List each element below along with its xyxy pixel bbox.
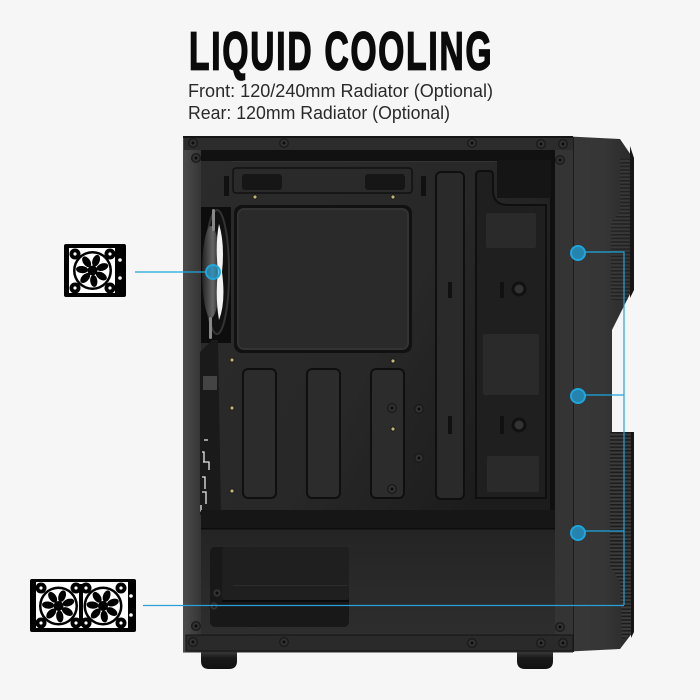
callout line: front radiator bracket <box>582 252 624 605</box>
icon: 120mm radiator <box>64 244 126 297</box>
subtitle text <box>188 81 493 123</box>
computer case <box>183 136 634 669</box>
rear io bracket <box>200 340 221 515</box>
icon: 240mm radiator <box>30 579 136 632</box>
subtitle text: Front: 120/240mm Radiator (Optional) <box>188 81 493 101</box>
top bracket with slots <box>233 168 412 193</box>
callout dot: front top <box>571 246 585 260</box>
chassis frame <box>183 136 573 652</box>
motherboard tray <box>201 150 555 515</box>
backplate cutout <box>234 205 412 353</box>
gold standoffs <box>230 195 395 493</box>
callout dot: front middle <box>571 389 585 403</box>
rear fan <box>201 207 231 343</box>
screws <box>188 138 568 648</box>
front panel fins <box>610 146 634 640</box>
power supply shroud <box>201 528 555 639</box>
bottom strip <box>186 635 573 651</box>
title: LIQUID COOLING <box>189 20 492 82</box>
subtitle text: Rear: 120mm Radiator (Optional) <box>188 103 450 123</box>
front panel <box>560 136 633 652</box>
callout dot: rear fan <box>206 265 220 279</box>
gap above power supply shroud <box>201 510 555 529</box>
callout dot: front bottom <box>571 526 585 540</box>
callout line: 240mm radiator <box>143 604 624 606</box>
case feet <box>201 652 553 669</box>
expansion cutouts <box>243 172 464 499</box>
cable management area <box>224 160 551 498</box>
callout line: 120mm radiator <box>135 271 207 273</box>
